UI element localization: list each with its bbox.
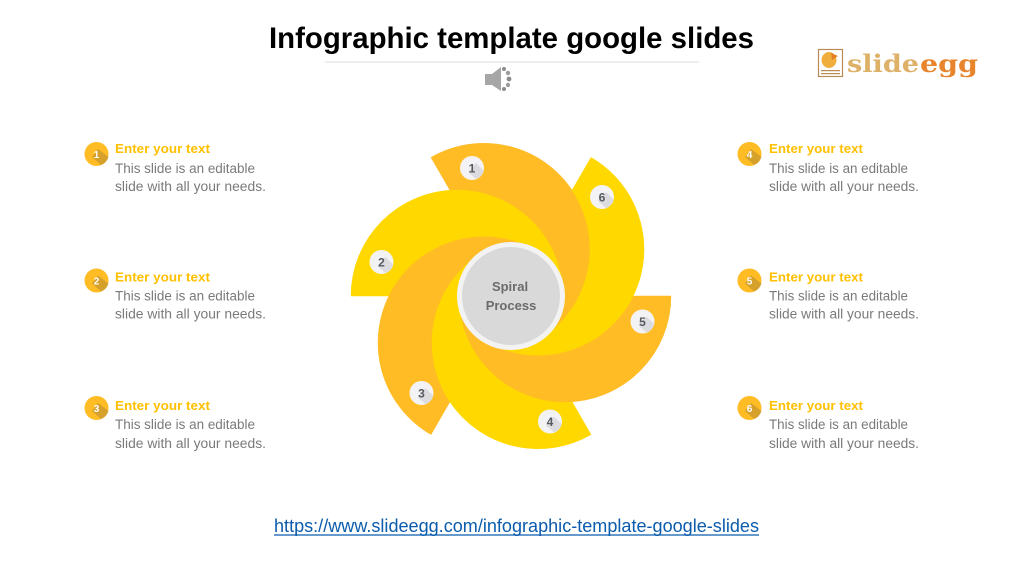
text block 6: 6 (747, 404, 753, 415)
text block 2: Enter your text (115, 270, 211, 284)
text block 1 (84, 141, 266, 194)
text block 1: Enter your text (115, 141, 211, 156)
number badge 3 (410, 381, 434, 405)
text block 4 (738, 141, 919, 194)
text block 3: Enter your text (115, 398, 211, 413)
center circle: Spiral (492, 279, 528, 294)
logo: slideegg: slide (847, 49, 919, 78)
center circle (460, 244, 562, 348)
center circle: Process (486, 298, 536, 313)
number badge 4 (538, 410, 562, 434)
text block 3: 3 (94, 404, 100, 415)
number badge 6: 6 (599, 190, 606, 204)
text block 2: 2 (94, 276, 100, 288)
title: Infographic template google slides (269, 22, 754, 55)
text block 5: 5 (747, 276, 753, 288)
number badge 4: 4 (547, 415, 554, 429)
logo: slideegg: egg (920, 49, 978, 78)
number badge 2: 2 (378, 256, 385, 270)
text block 2: slide with all your needs. (115, 306, 266, 322)
blade 2 (351, 190, 563, 296)
text block 1: This slide is an editable (115, 161, 255, 176)
icon: speaker (485, 67, 511, 91)
text block 3: slide with all your needs. (115, 436, 266, 451)
logo: slideegg (818, 49, 978, 78)
link text: https://www.slideegg.com/infographic-template-google-slides (274, 515, 759, 536)
blade 3 (339, 198, 537, 435)
text block 1: 1 (94, 150, 100, 161)
text block 3 (84, 396, 266, 451)
number badge 6 (590, 185, 614, 209)
text block 5 (738, 268, 919, 322)
text block 6 (738, 396, 919, 451)
number badge 2 (370, 250, 394, 274)
text block 4: Enter your text (769, 141, 864, 156)
number badge 5: 5 (639, 315, 646, 329)
text block 4: slide with all your needs. (769, 179, 919, 194)
text block 5: slide with all your needs. (769, 306, 919, 322)
text block 3: This slide is an editable (115, 417, 255, 432)
text block 4: 4 (747, 150, 753, 161)
text block 2: This slide is an editable (115, 288, 255, 304)
blade 5 (459, 296, 671, 402)
blade 6 (485, 157, 683, 394)
text block 1: slide with all your needs. (115, 179, 266, 194)
text block 4: This slide is an editable (769, 161, 908, 176)
text block 5: Enter your text (769, 270, 864, 284)
blade 1 (431, 104, 629, 341)
text block 6: slide with all your needs. (769, 436, 919, 451)
blade 4 (393, 251, 591, 488)
text block 6: Enter your text (769, 398, 864, 413)
number badge 1 (460, 156, 484, 180)
text block 5: This slide is an editable (769, 288, 908, 304)
text block 2 (84, 268, 266, 322)
number badge 1: 1 (469, 162, 476, 176)
number badge 3: 3 (418, 386, 425, 400)
text block 6: This slide is an editable (769, 417, 908, 432)
spiral chart (350, 143, 672, 449)
number badge 5 (630, 310, 654, 334)
